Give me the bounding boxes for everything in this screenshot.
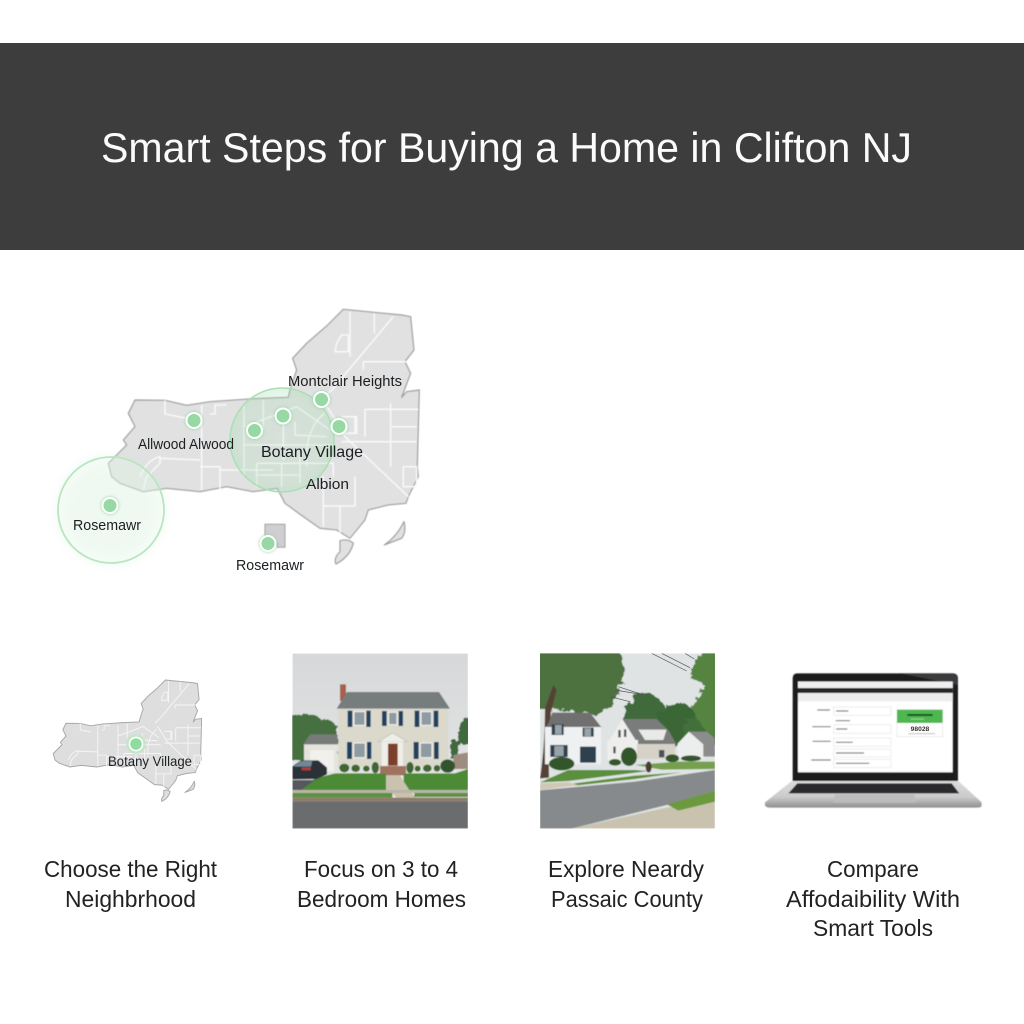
- results card: [897, 710, 943, 737]
- step 1 icon: small map: [53, 680, 202, 801]
- map labels: Montclair Heights: [288, 373, 402, 390]
- screen: [798, 682, 953, 772]
- facade: [338, 709, 448, 767]
- map markers: [102, 392, 346, 551]
- step 1 caption: [44, 856, 218, 912]
- map outline and roads: [108, 309, 419, 564]
- step 4 caption: Smart Tools: [813, 915, 933, 941]
- shrubs: [339, 759, 455, 773]
- step 1 caption: Neighbrhood: [65, 886, 196, 912]
- right house: [678, 732, 705, 758]
- shrubs: [549, 747, 701, 770]
- car: [292, 760, 327, 779]
- small map label: Botany Village: [108, 753, 192, 769]
- map labels: Rosemawr: [236, 558, 304, 574]
- laptop base: [765, 781, 982, 808]
- road: [540, 770, 715, 829]
- map labels: Allwood Alwood: [138, 437, 234, 453]
- step 2 caption: [297, 856, 466, 912]
- lawn and walkway: [300, 773, 386, 790]
- step 4 caption: Compare: [827, 856, 919, 882]
- form fields: [834, 707, 891, 768]
- coverage circle: Botany Village: [230, 388, 334, 492]
- step 3 caption: Explore Neardy: [548, 856, 704, 882]
- road: [292, 801, 468, 829]
- step 2 caption: Focus on 3 to 4: [304, 856, 458, 882]
- step 3 photo: residential street: [540, 653, 715, 829]
- windows: [347, 711, 439, 759]
- sidewalk and verge: [572, 801, 715, 829]
- laptop screen bezel: [793, 673, 958, 781]
- lawns: [540, 770, 648, 782]
- step 3 caption: [548, 856, 704, 912]
- background trees: [540, 653, 715, 748]
- step 4 caption: Affodaibility With: [786, 886, 960, 912]
- step 1 caption: Choose the Right: [44, 856, 218, 882]
- map labels: Rosemawr: [73, 518, 141, 534]
- map labels: [73, 373, 402, 574]
- left house: [545, 713, 602, 728]
- tree trunk: [540, 685, 557, 778]
- title banner: [0, 43, 1024, 250]
- power lines: [610, 653, 694, 702]
- map labels: Botany Village: [261, 444, 363, 461]
- porch and door: [378, 733, 408, 742]
- title: Smart Steps for Buying a Home in Clifton NJ: [101, 124, 912, 171]
- step 3 caption: Passaic County: [551, 886, 703, 912]
- step 4 caption: [786, 856, 960, 941]
- roof: [337, 692, 450, 709]
- step 2 photo: colonial house: [285, 653, 478, 829]
- result number: 98028: [911, 727, 930, 733]
- step 4 icon: laptop with calculator: [765, 673, 982, 808]
- chimney: [340, 684, 346, 701]
- main neighborhood map: [58, 309, 419, 574]
- coverage circle: Rosemawr: [58, 457, 164, 563]
- step 2 caption: Bedroom Homes: [297, 886, 466, 912]
- garage: [303, 734, 338, 744]
- center house: [610, 720, 635, 740]
- small map marker: [126, 734, 146, 754]
- map labels: Albion: [306, 476, 349, 493]
